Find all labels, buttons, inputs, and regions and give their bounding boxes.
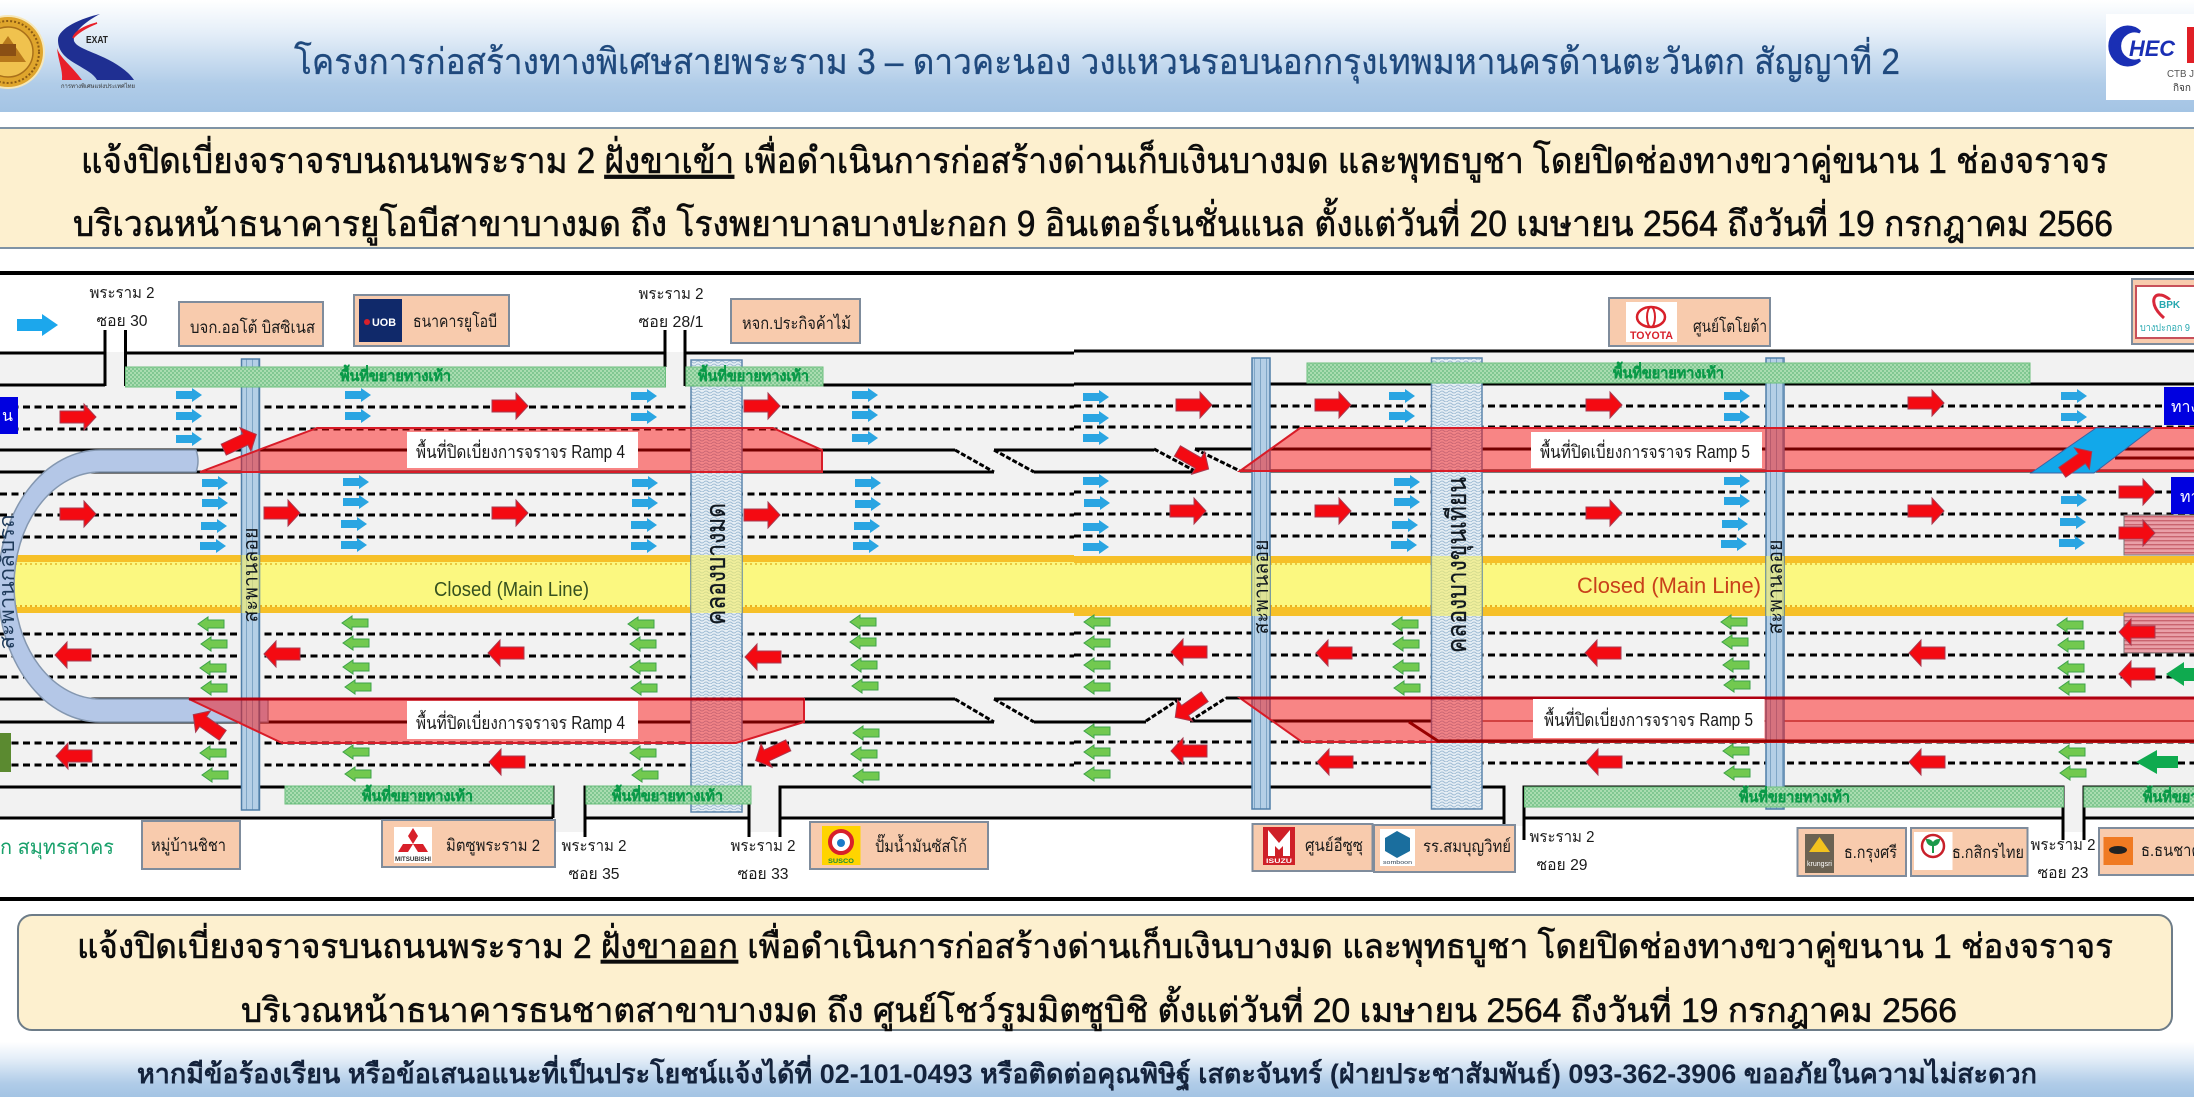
canal: Khlong Bang Mot xyxy=(691,360,742,812)
title: โครงการก่อสร้างทางพิเศษสายพระราม 3 – ดาวคะนอง วงแหวนรอบนอกกรุงเทพมหานครด้านตะวันตก สัญญาที่ 2 xyxy=(294,37,1900,84)
widened footpath zones: พื้นที่ขยายทางเท้า xyxy=(1613,361,1724,382)
logo: EXAT: EXAT xyxy=(86,35,108,46)
widened footpath zones: พื้นที่ขยายทางเท้า xyxy=(698,364,809,385)
widened footpath zones: พื้นที่ขยายทางเท้า xyxy=(612,784,723,805)
lane lines xyxy=(0,330,2194,840)
footpath label: พื้นที่ขยายทางเท้า xyxy=(340,364,451,385)
landmark: UOB: ธนาคารยูโอบี xyxy=(413,311,497,332)
soi label: Rama 2 Soi 35 xyxy=(562,838,627,883)
landmark: Auto Business: บจก.ออโต้ บิสซิเนส xyxy=(190,317,316,337)
landmark: Isuzu xyxy=(1252,824,1372,871)
yellow tint over crossings xyxy=(242,555,1784,616)
notice text line 2: บริเวณหน้าธนาคารธนชาตสาขาบางมด ถึง ศูนย์โชว์รูมมิตซูบิชิ ตั้งแต่วันที่ 20 เมษายน 2564 ถึงวันที่ 19 กรกฎาคม 2566 xyxy=(241,986,1957,1031)
landmark: Thanachart bank xyxy=(2099,828,2194,875)
landmark: Bangpakok 9 hospital: บางปะกอก 9 xyxy=(2140,323,2190,334)
footbridge 1 xyxy=(242,359,260,810)
header band xyxy=(0,0,2194,112)
large green arrows xyxy=(2136,662,2194,774)
landmark: Bangpakok 9 hospital xyxy=(2132,279,2194,344)
widened footpath zones: พื้นที่ขยายทางเท้า xyxy=(1739,785,1850,806)
green sign left xyxy=(0,733,11,772)
landmark: Isuzu: ISUZU xyxy=(1266,859,1292,865)
label: footbridge 1: สะพานลอย xyxy=(240,528,262,622)
soi label: Rama 2 Soi 29: ซอย 29 xyxy=(1536,857,1588,874)
blue sign left xyxy=(0,397,18,434)
soi label: Rama 2 Soi 28/1: ซอย 28/1 xyxy=(638,314,704,331)
closed area: Ramp 4 upper xyxy=(200,428,822,472)
landmark: Kasikorn bank: ธ.กสิกรไทย xyxy=(1952,842,2024,862)
closed area: Ramp 5 lower xyxy=(1240,698,2194,742)
Ramp 4 lower label: พื้นที่ปิดเบี่ยงการจราจร Ramp 4 xyxy=(416,710,625,733)
small blue traffic arrows xyxy=(176,388,2087,554)
landmark: UOB xyxy=(354,295,509,346)
soi label: Rama 2 Soi 35: ซอย 35 xyxy=(568,866,620,883)
soi label: Rama 2 Soi 30: พระราม 2 xyxy=(90,285,155,302)
footer band xyxy=(0,1042,2194,1097)
landmark: Susco fuel station xyxy=(810,822,988,869)
landmark: Toyota: TOYOTA xyxy=(1630,330,1673,342)
landmark: Susco fuel station: SUSCO xyxy=(828,859,854,865)
soi label: Rama 2 Soi 33: ซอย 33 xyxy=(738,866,789,883)
landmark: Kasikorn bank xyxy=(1911,828,2028,876)
footbridge 2 xyxy=(1252,358,1270,809)
landmark: Susco fuel station: ปั๊มน้ำมันซัสโก้ xyxy=(875,833,967,856)
soi label: Rama 2 Soi 23: ซอย 23 xyxy=(2038,865,2089,882)
widened footpath zones xyxy=(126,361,2194,807)
landmark: Chicha village: หมู่บ้านชิชา xyxy=(151,836,226,856)
landmark: Mitsubishi xyxy=(382,820,555,867)
soi label: Rama 2 Soi 28/1 xyxy=(638,286,704,331)
red arrows inbound direction xyxy=(60,390,2155,546)
notice text line 2: บริเวณหน้าธนาคารยูโอบีสาขาบางมด ถึง โรงพยาบาลบางปะกอก 9 อินเตอร์เนชั่นแนล ตั้งแต่วันที่ 20 เมษายน 2564 ถึงวันที่ 19 กรกฎาคม 2566 xyxy=(73,197,2113,246)
soi label: Rama 2 Soi 23: พระราม 2 xyxy=(2030,837,2096,854)
widened footpath zones: พื้นที่ขยายทางเท้า xyxy=(362,784,473,805)
landmark: Somboonwit school xyxy=(1374,825,1515,872)
blue sign left: น xyxy=(2,408,13,425)
footer contact text: หากมีข้อร้องเรียน หรือข้อเสนอแนะที่เป็นประโยชน์แจ้งได้ที่ 02-101-0493 หรือติดต่อคุณพิษิฐ์ เสตะจันทร์ (ฝ่ายประชาสัมพันธ์) 093-362-3906 ขออภัยในความไม่สะดวก xyxy=(137,1054,2037,1092)
main line labels xyxy=(434,573,1761,601)
soi label: Rama 2 Soi 35: พระราม 2 xyxy=(562,838,627,855)
U-turn bridge xyxy=(0,450,268,722)
logo: EXAT xyxy=(57,14,135,90)
road surface xyxy=(0,352,2194,832)
notice panel: outbound closure xyxy=(18,915,2172,1031)
hatched blocks at right edge xyxy=(2124,515,2194,653)
small green traffic arrows xyxy=(198,615,2086,783)
label: footbridge 2: สะพานลอย xyxy=(1251,540,1273,634)
logo: CHEC CTB joint venture: CTB J xyxy=(2167,69,2194,80)
landmark: Isuzu: ศูนย์อีซูซุ xyxy=(1305,836,1363,856)
main line closed yellow band xyxy=(0,555,2194,616)
label: canal Bang Mot: คลองบางมด xyxy=(701,503,731,625)
Ramp 5 lower label: พื้นที่ปิดเบี่ยงการจราจร Ramp 5 xyxy=(1544,707,1753,730)
notice text line 1: แจ้งปิดเบี่ยงจราจรบนถนนพระราม 2 ฝั่งขาออก เพื่อดำเนินการก่อสร้างด่านเก็บเงินบางมด และพุทธบูชา โดยปิดช่องทางขวาคู่ขนาน 1 ช่องจราจร xyxy=(77,923,2113,967)
landmark: Chicha village xyxy=(142,821,240,869)
soi label: Rama 2 Soi 33 xyxy=(730,838,796,883)
soi label: Rama 2 Soi 23 xyxy=(2030,837,2096,882)
closed area: Ramp 5 upper xyxy=(1240,428,2194,473)
landmark: Prakit timber xyxy=(731,299,860,343)
logo: CHEC CTB joint venture: HEC xyxy=(2129,36,2176,61)
red arrows outbound direction xyxy=(55,619,2155,775)
landmark: Mitsubishi: MITSUBISHI xyxy=(395,857,431,863)
landmark: Toyota xyxy=(1609,298,1770,346)
closed label right: Closed (Main Line) xyxy=(1577,573,1761,598)
logo: EXAT: การทางพิเศษแห่งประเทศไทย xyxy=(61,82,135,90)
landmark: Krungsri bank xyxy=(1798,828,1906,876)
landmark: Auto Business xyxy=(179,302,323,346)
soi label: Rama 2 Soi 29: พระราม 2 xyxy=(1530,829,1595,846)
logo: CHEC CTB joint venture: กิจก xyxy=(2173,83,2191,94)
blue sign right lower xyxy=(2171,477,2194,514)
bridge and canal labels xyxy=(240,477,1787,653)
footbridge 3 xyxy=(1766,358,1784,809)
logo: ministry seal xyxy=(0,15,45,89)
landmark: Krungsri bank: ธ.กรุงศรี xyxy=(1844,843,1897,863)
direction arrow xyxy=(17,314,58,336)
closed area: Ramp 4 lower xyxy=(189,699,804,743)
landmark: Krungsri bank: krungsri xyxy=(1807,861,1832,868)
blue sign right top xyxy=(2164,387,2194,425)
destination text: Samut Sakhon: ก สมุทรสาคร xyxy=(0,837,114,860)
label: canal Bang Khun Thian: คลองบางขุนเทียน xyxy=(1442,477,1474,653)
label: footbridge 3: สะพานลอย xyxy=(1765,540,1787,634)
soi label: Rama 2 Soi 30 xyxy=(90,285,155,330)
landmark: Mitsubishi: มิตซูพระราม 2 xyxy=(446,836,540,856)
road diagram panel xyxy=(0,271,2194,901)
landmark: Toyota: ศูนย์โตโยต้า xyxy=(1693,316,1767,337)
logo: CHEC CTB joint venture xyxy=(2106,14,2194,100)
notice text line 1: แจ้งปิดเบี่ยงจราจรบนถนนพระราม 2 ฝั่งขาเข้า เพื่อดำเนินการก่อสร้างด่านเก็บเงินบางมด และพุทธบูชา โดยปิดช่องทางขวาคู่ขนาน 1 ช่องจราจร xyxy=(81,136,2108,183)
soi label: Rama 2 Soi 29 xyxy=(1530,829,1595,874)
soi label: Rama 2 Soi 28/1: พระราม 2 xyxy=(638,286,704,303)
landmark: Prakit timber: หจก.ประกิจค้าไม้ xyxy=(742,313,851,333)
landmark: Bangpakok 9 hospital: BPK xyxy=(2159,300,2181,311)
Ramp 4 upper label: พื้นที่ปิดเบี่ยงการจราจร Ramp 4 xyxy=(416,439,625,462)
soi label: Rama 2 Soi 30: ซอย 30 xyxy=(96,313,148,330)
blue crossing zone xyxy=(2031,428,2153,473)
closed label left: Closed (Main Line) xyxy=(434,579,589,601)
landmark: Somboonwit school: รร.สมบุญวิทย์ xyxy=(1423,837,1511,857)
canal: Khlong Bang Khun Thian xyxy=(1432,358,1482,809)
soi label: Rama 2 Soi 33: พระราม 2 xyxy=(730,838,796,855)
Ramp 5 upper label: พื้นที่ปิดเบี่ยงการจราจร Ramp 5 xyxy=(1540,439,1750,462)
landmark: Somboonwit school: somboon xyxy=(1383,860,1412,866)
landmark: UOB: UOB xyxy=(372,317,396,329)
notice panel: inbound closure xyxy=(0,128,2194,248)
